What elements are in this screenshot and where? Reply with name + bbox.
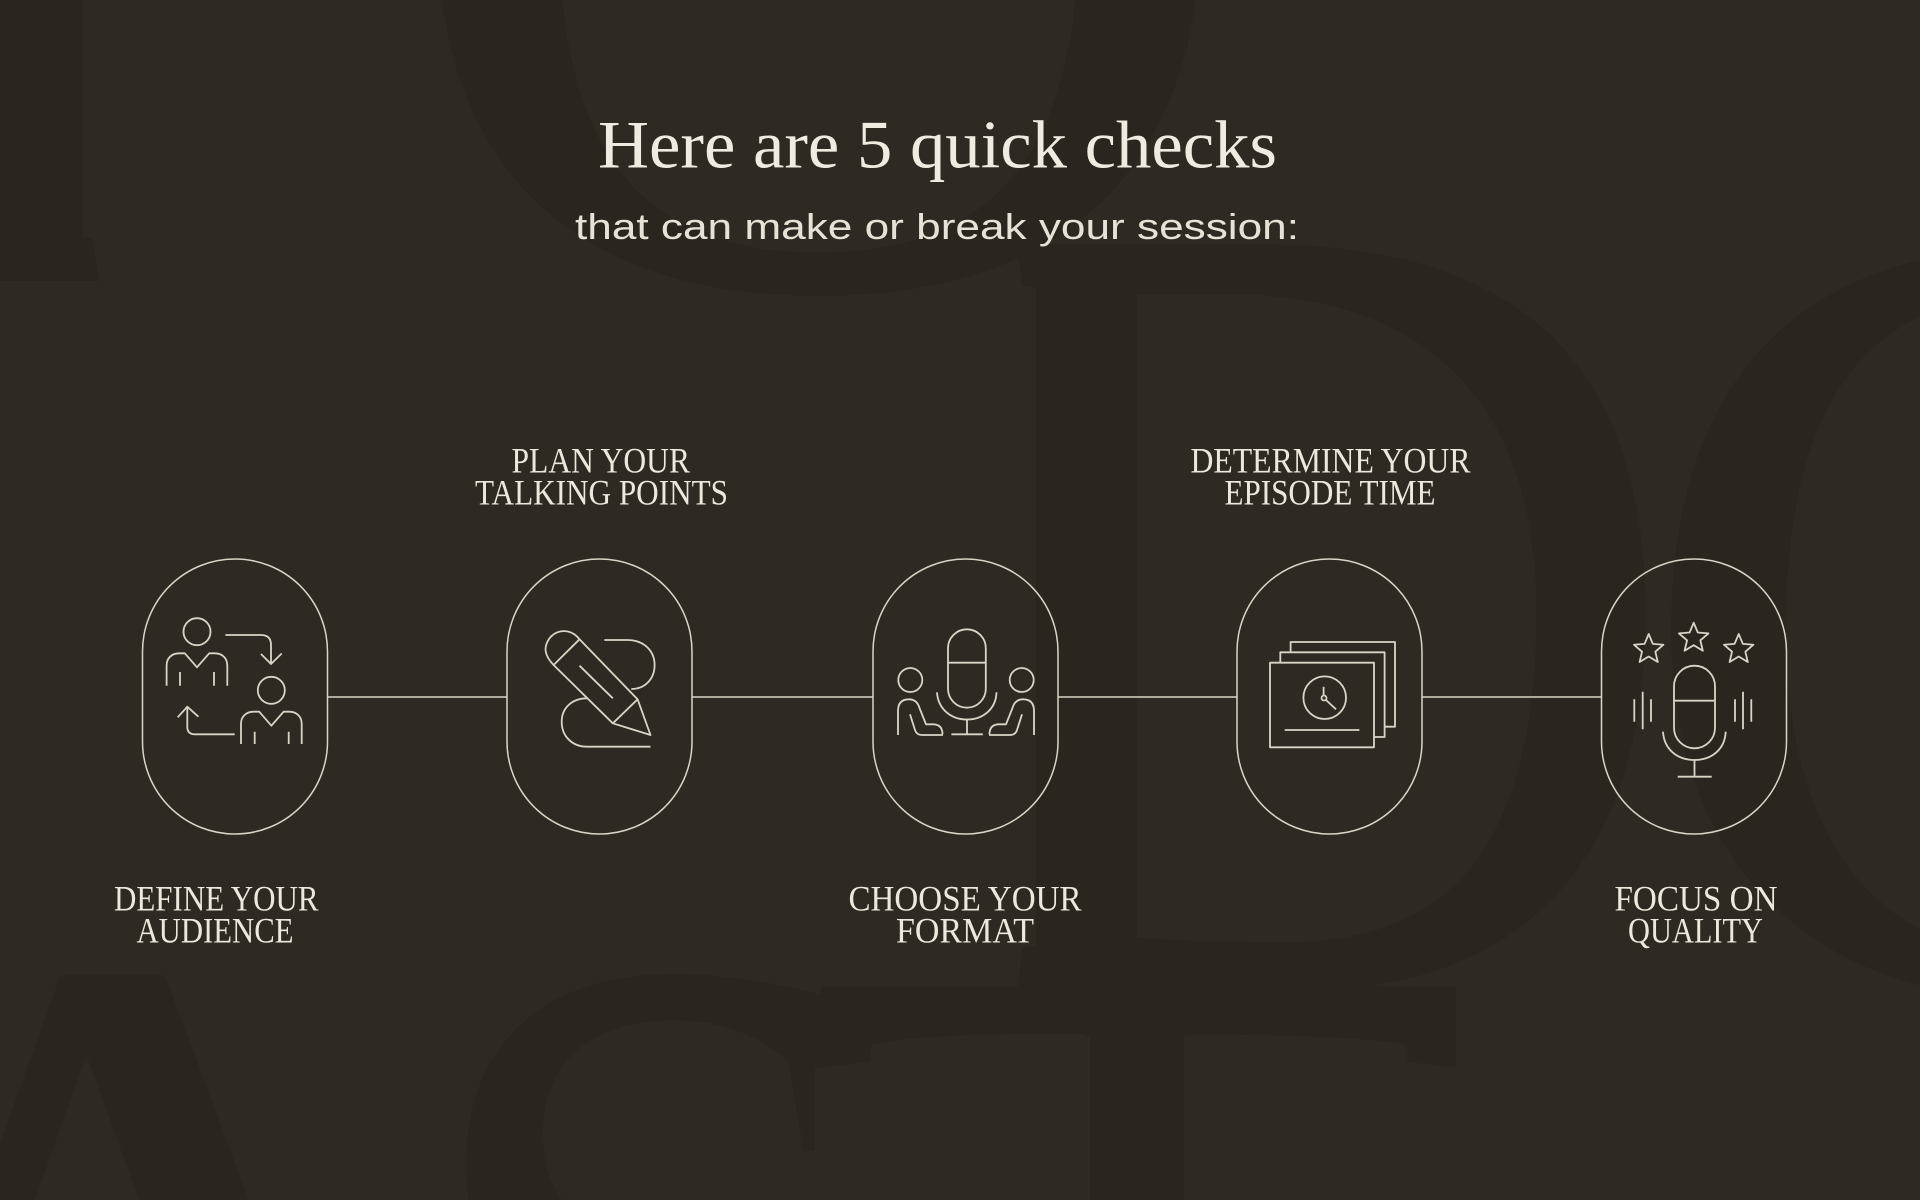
label 5 <box>1614 879 1778 951</box>
icon: pencil with scribble <box>546 631 655 747</box>
capsule 1 <box>142 559 328 834</box>
label 4: EPISODE TIME <box>1224 472 1436 512</box>
label 2: TALKING POINTS <box>475 472 728 512</box>
label 5: QUALITY <box>1628 911 1763 951</box>
capsule 2 <box>507 559 692 834</box>
capsule 5 <box>1602 559 1786 834</box>
subtitle: that can make or break your session: <box>575 206 1299 247</box>
label 3: FORMAT <box>896 911 1034 951</box>
label 2: PLAN YOUR <box>512 441 690 481</box>
step 4: determine your episode time <box>1190 441 1470 834</box>
connector lines between steps <box>328 696 1602 698</box>
label 1: AUDIENCE <box>136 911 294 951</box>
label 5: FOCUS ON <box>1614 879 1778 919</box>
step 2: plan your talking points <box>475 441 728 834</box>
label 1 <box>114 879 318 951</box>
label 4: DETERMINE YOUR <box>1190 441 1470 481</box>
icon: microphone with three stars <box>1634 623 1753 777</box>
step 3: choose your format <box>848 559 1082 951</box>
step 5: focus on quality <box>1602 559 1786 951</box>
label 2 <box>475 441 728 512</box>
title: Here are 5 quick checks <box>598 106 1277 182</box>
label 4 <box>1190 441 1470 512</box>
icon: two people exchanging <box>167 618 302 744</box>
icon: stacked slides with clock <box>1270 642 1395 747</box>
label 1: DEFINE YOUR <box>114 879 318 919</box>
label 3 <box>848 879 1082 951</box>
capsule 4 <box>1237 559 1422 834</box>
icon: two people around a microphone <box>898 629 1034 735</box>
step 1: define your audience <box>114 559 328 951</box>
capsule 3 <box>873 559 1058 834</box>
label 3: CHOOSE YOUR <box>848 879 1082 919</box>
